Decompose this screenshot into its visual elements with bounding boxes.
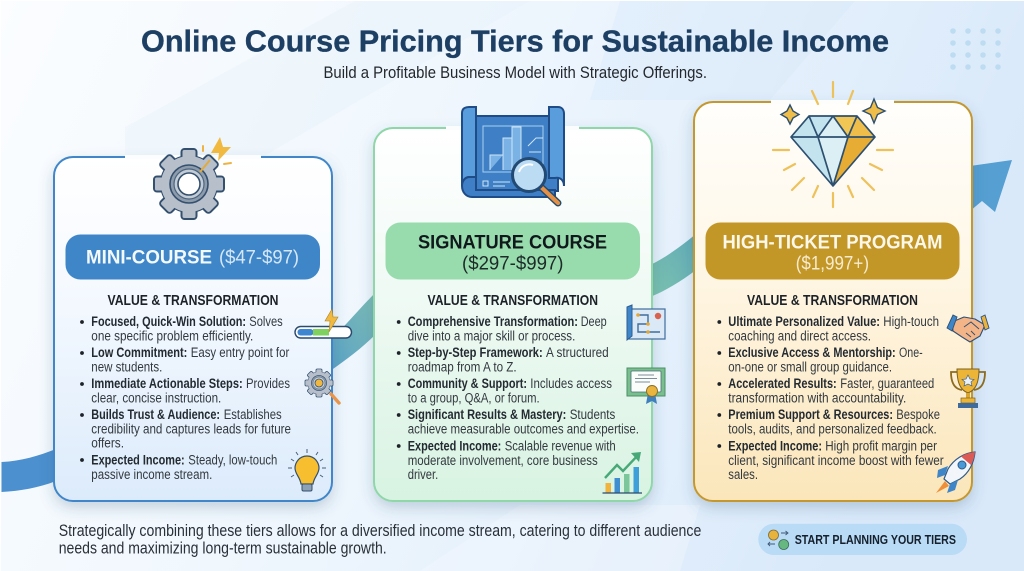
icon: money exchange (768, 530, 789, 550)
benefit list (397, 314, 639, 483)
heading: value and transformation: VALUE & TRANSFORMATION (747, 293, 918, 309)
benefit list: Easy entry point for (191, 345, 290, 361)
tier label: signature course: ($297-$997) (462, 252, 564, 274)
benefit list: Scalable revenue with (505, 438, 616, 454)
icon: trophy (951, 369, 985, 408)
benefit list: Comprehensive Transformation: (408, 314, 578, 330)
icon: certificate (627, 368, 665, 404)
benefit list: roadmap from A to Z. (408, 360, 517, 376)
benefit list: dive into a major skill or process. (408, 328, 575, 344)
benefit list: transformation with accountability. (728, 390, 906, 406)
benefit list (80, 314, 291, 483)
tier label: high-ticket program: HIGH-TICKET PROGRAM (722, 232, 942, 254)
icon: progress bar with lightning (295, 309, 352, 338)
benefit list: sales. (728, 467, 758, 483)
benefit list: Faster, guaranteed (840, 376, 934, 392)
benefit list: Expected Income: (91, 452, 185, 468)
benefit list: new students. (91, 360, 162, 376)
icon: rocket (936, 452, 975, 493)
benefit list: Includes access (530, 376, 612, 392)
benefit list: Establishes (224, 407, 282, 423)
benefit list: moderate involvement, core business (408, 453, 598, 469)
benefit list: High-touch (883, 314, 939, 330)
benefit list: Builds Trust & Audience: (91, 407, 220, 423)
icon: light bulb (288, 449, 326, 491)
title: Online Course Pricing Tiers for Sustainable Income (141, 24, 889, 58)
benefit list: to a group, Q&A, or forum. (408, 390, 540, 406)
benefit list: Step-by-Step Framework: (408, 345, 543, 361)
benefit list: on-one or small group guidance. (728, 360, 892, 376)
benefit list: One- (899, 345, 923, 361)
benefit list: Ultimate Personalized Value: (728, 314, 880, 330)
benefit list: Accelerated Results: (728, 376, 837, 392)
benefit list: Steady, low-touch (188, 452, 277, 468)
subtitle: Build a Profitable Business Model with Strategic Offerings. (324, 63, 707, 82)
benefit list: Community & Support: (408, 376, 527, 392)
benefit list: driver. (408, 467, 438, 483)
footer summary: Strategically combining these tiers allows for a diversified income stream, catering to different audience (59, 522, 701, 540)
benefit list: tools, audits, and personalized feedback. (728, 422, 937, 438)
tier label: mini-course: MINI-COURSE (86, 246, 212, 268)
footer summary: needs and maximizing long-term sustainable growth. (59, 540, 387, 558)
benefit list: Low Commitment: (91, 345, 187, 361)
benefit list: Significant Results & Mastery: (408, 407, 566, 423)
benefit list: Students (570, 407, 615, 423)
footer summary (59, 522, 701, 558)
heading: value and transformation: VALUE & TRANSFORMATION (108, 293, 278, 309)
benefit list: Deep (581, 314, 607, 330)
benefit list: credibility and captures leads for future (91, 422, 291, 438)
decorative dot grid (950, 28, 1001, 70)
benefit list: Expected Income: (408, 438, 501, 454)
benefit list: Expected Income: (728, 438, 822, 454)
benefit list: High profit margin per (825, 438, 937, 454)
panel: high-ticket program (694, 82, 989, 501)
tier label: signature course: SIGNATURE COURSE (418, 232, 607, 254)
tier label: high-ticket program (706, 222, 960, 280)
tier label: signature course (386, 222, 640, 280)
benefit list: A structured (546, 345, 609, 361)
benefit list: coaching and direct access. (728, 328, 871, 344)
benefit list: one specific problem efficiently. (91, 328, 253, 344)
icon: gear with lightning (154, 137, 231, 219)
call to action button (758, 524, 967, 555)
benefit list: Premium Support & Resources: (728, 407, 893, 423)
icon: rising bar chart (602, 452, 642, 493)
tier label: mini-course (66, 234, 320, 280)
call to action button: START PLANNING YOUR TIERS (795, 532, 956, 547)
icon: blueprint with magnifier (462, 107, 564, 203)
growth arrow ribbon (2, 160, 1012, 492)
panel: mini-course (54, 137, 352, 501)
benefit list: Provides (246, 376, 290, 392)
icon: handshake (947, 315, 989, 342)
benefit list: achieve measurable outcomes and expertise. (408, 422, 639, 438)
benefit list: Bespoke (896, 407, 940, 423)
benefit list: Exclusive Access & Mentorship: (728, 345, 896, 361)
heading: value and transformation: VALUE & TRANSFORMATION (428, 293, 598, 309)
benefit list: client, significant income boost with fewer (728, 453, 944, 469)
icon: roadmap (627, 305, 665, 340)
tier label: mini-course: ($47-$97) (219, 246, 299, 268)
benefit list: offers. (91, 436, 124, 452)
icon: diamond with rays (773, 82, 893, 207)
benefit list: Solves (249, 314, 283, 330)
tier label: high-ticket program: ($1,997+) (796, 252, 869, 274)
benefit list: Immediate Actionable Steps: (91, 376, 243, 392)
benefit list: Focused, Quick-Win Solution: (91, 314, 246, 330)
panel: signature course (374, 107, 665, 501)
benefit list: clear, concise instruction. (91, 390, 221, 406)
benefit list (717, 314, 944, 483)
icon: small gear and magnifier (305, 369, 339, 403)
benefit list: passive income stream. (91, 467, 212, 483)
